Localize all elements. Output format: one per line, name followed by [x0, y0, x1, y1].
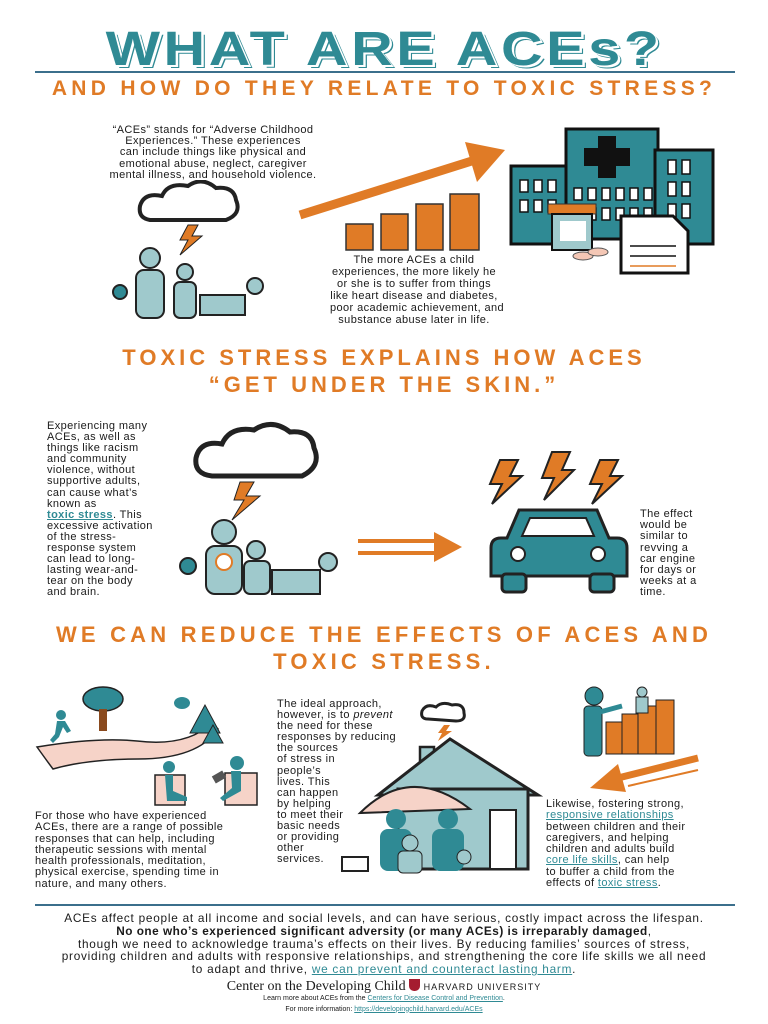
text: more ACEs: [330, 254, 504, 326]
text: toxic stress explanation: things like racism: [47, 442, 139, 454]
arrow: rising: [298, 142, 505, 220]
heading: toxic stress: [122, 345, 646, 397]
text: possible responses: ACEs, there are a range of possible: [35, 821, 223, 833]
heading: reduce effects: [56, 622, 712, 674]
footer links: Learn more about ACEs from the Centers for Disease Control and Prevention.: [263, 995, 505, 1002]
text: more ACEs: or she is to suffer from things: [337, 278, 491, 290]
footer text: though we need to acknowledge trauma’s effects on their lives. By reducing families’ sources of stress,: [78, 937, 690, 951]
heading: toxic stress: “GET UNDER THE SKIN.”: [209, 372, 559, 397]
text: prevent: other: [277, 842, 304, 854]
text: toxic stress explanation: Experiencing many: [47, 420, 147, 432]
text: possible responses: [35, 810, 223, 890]
text: toxic stress explanation: excessive activation: [47, 520, 153, 532]
text: ACEs definition: [110, 124, 316, 181]
text: toxic stress explanation: ACEs, as well as: [47, 431, 136, 443]
heading: reduce effects: TOXIC STRESS.: [273, 649, 495, 674]
text: car analogy: weeks at a: [640, 575, 697, 587]
text: toxic stress explanation: violence, without: [47, 464, 135, 476]
text: toxic stress explanation: can lead to long-: [47, 553, 135, 565]
text: responsive relationships: core life skills, can help: [546, 854, 670, 866]
text: car analogy: similar to: [640, 530, 688, 542]
arrow: right: [358, 532, 462, 562]
text: toxic stress explanation: toxic stress. This: [47, 509, 142, 521]
illustration: cloud, lightning, family: [112, 180, 264, 319]
text: car analogy: [640, 508, 697, 598]
illustration: adult, child, bars: [584, 686, 674, 756]
text: responsive relationships: children and adults build: [546, 843, 675, 855]
subtitle: AND HOW DO THEY RELATE TO TOXIC STRESS?: [52, 77, 716, 100]
text: ACEs definition: mental illness, and household violence.: [110, 169, 316, 181]
text: car analogy: revving a: [640, 542, 688, 554]
text: car analogy: car engine: [640, 553, 695, 565]
text: responsive relationships: to buffer a child from the: [546, 866, 675, 878]
text: possible responses: nature, and many others.: [35, 878, 167, 890]
text: ACEs definition: can include things like physical and: [120, 146, 306, 158]
heading: reduce effects: WE CAN REDUCE THE EFFECTS OF ACES AND: [56, 622, 712, 647]
footer text: providing children and adults with responsive relationships, and strengthening the core life skills we all need: [62, 949, 706, 963]
text: toxic stress explanation: supportive adults,: [47, 475, 140, 487]
text: toxic stress explanation: known as: [47, 498, 97, 510]
text: possible responses: For those who have experienced: [35, 810, 207, 822]
text: prevent: the sources: [277, 742, 338, 754]
text: responsive relationships: Likewise, fostering strong,: [546, 798, 684, 810]
text: prevent: [277, 698, 396, 865]
illustration: cloud & stressed family: [179, 422, 338, 595]
illustration: path, trees, therapy: [36, 686, 258, 806]
text: possible responses: physical exercise, spending time in: [35, 866, 219, 878]
text: prevent: however, is to prevent: [277, 709, 393, 721]
text: toxic stress explanation: lasting wear-and-: [47, 564, 138, 576]
footer text: ACEs affect people at all income and social levels, and can have serious, costly impact across the lifespan.: [64, 911, 704, 925]
text: prevent: the need for these: [277, 720, 373, 732]
text: prevent: responses by reducing: [277, 731, 396, 743]
text: more ACEs: The more ACEs a child: [354, 254, 474, 266]
footer links: For more information: https://developingchild.harvard.edu/ACEs: [285, 1006, 483, 1012]
text: toxic stress explanation: of the stress-: [47, 531, 116, 543]
text: prevent: or providing: [277, 831, 339, 843]
text: car analogy: would be: [640, 519, 687, 531]
text: more ACEs: experiences, the more likely he: [332, 266, 496, 278]
title: WHAT ARE ACEs?: [105, 23, 663, 76]
text: ACEs definition: “ACEs” stands for “Adverse Childhood: [113, 124, 313, 136]
text: prevent: services.: [277, 853, 324, 865]
arrow: down-left: [590, 754, 699, 792]
footer logo: Center on the Developing Child HARVARD UNIVERSITY: [227, 979, 541, 994]
heading: toxic stress: TOXIC STRESS EXPLAINS HOW ACES: [122, 345, 646, 370]
text: prevent: people’s: [277, 765, 321, 777]
text: responsive relationships: responsive relationships: [546, 809, 674, 821]
text: ACEs definition: emotional abuse, neglect, caregiver: [119, 158, 307, 170]
icon: car with lightning: [488, 451, 628, 594]
text: toxic stress explanation: response system: [47, 542, 136, 554]
text: car analogy: for days or: [640, 564, 696, 576]
text: possible responses: health professionals, meditation,: [35, 855, 206, 867]
text: more ACEs: substance abuse later in life.: [338, 314, 490, 326]
text: car analogy: time.: [640, 586, 666, 598]
text: prevent: The ideal approach,: [277, 698, 382, 710]
footer text: [62, 911, 706, 976]
text: toxic stress explanation: and brain.: [47, 586, 100, 598]
footer links: [263, 994, 505, 1013]
text: more ACEs: like heart disease and diabetes,: [330, 290, 498, 302]
icon: hospital: [510, 128, 714, 274]
text: possible responses: therapeutic sessions with mental: [35, 844, 207, 856]
illustration: house, umbrella, family: [341, 702, 543, 874]
text: ACEs definition: Experiences.” These experiences: [125, 135, 301, 147]
text: prevent: basic needs: [277, 820, 340, 832]
text: prevent: of stress in: [277, 753, 335, 765]
text: toxic stress explanation: and community: [47, 453, 127, 465]
text: toxic stress explanation: can cause what’s: [47, 487, 138, 499]
text: toxic stress explanation: [47, 420, 153, 598]
text: prevent: can happen: [277, 787, 338, 799]
text: responsive relationships: caregivers, and helping: [546, 832, 669, 844]
text: prevent: by helping: [277, 798, 331, 810]
text: prevent: lives. This: [277, 776, 330, 788]
footer text: No one who’s experienced significant adversity (or many ACEs) is irreparably damaged,: [116, 924, 652, 938]
text: responsive relationships: effects of toxic stress.: [546, 877, 661, 889]
footer text: to adapt and thrive, we can prevent and counteract lasting harm.: [192, 962, 576, 976]
text: possible responses: responses that can help, including: [35, 833, 215, 845]
text: responsive relationships: between children and their: [546, 821, 685, 833]
text: prevent: to meet their: [277, 809, 343, 821]
text: toxic stress explanation: tear on the body: [47, 575, 133, 587]
text: more ACEs: poor academic achievement, and: [330, 302, 504, 314]
bar chart: [345, 193, 480, 251]
text: car analogy: The effect: [640, 508, 693, 520]
text: responsive relationships: [546, 798, 685, 889]
